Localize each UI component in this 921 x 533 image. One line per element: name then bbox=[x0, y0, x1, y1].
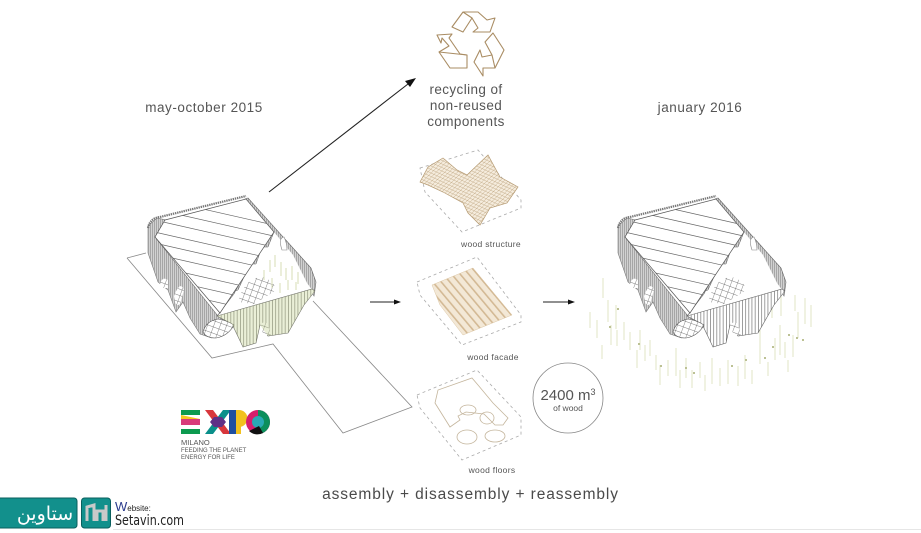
letter X bbox=[205, 410, 231, 434]
letter P bbox=[229, 410, 248, 434]
text: recycling of non-reused components: non-reused bbox=[430, 98, 502, 113]
arrow: to recycling bbox=[269, 78, 416, 192]
grass: small dots bbox=[609, 309, 804, 373]
callout: 2400 m3 of wood: 2400 m bbox=[540, 387, 591, 404]
callout: 2400 m3 of wood: of wood bbox=[553, 403, 583, 413]
heading: january 2016: january 2016 bbox=[657, 100, 742, 115]
logo text: ENERGY FOR LIFE bbox=[181, 455, 235, 461]
heading: may-october 2015: may-october 2015 bbox=[145, 100, 263, 115]
site plan outline bbox=[127, 253, 412, 433]
arrow: components to reassembled building bbox=[543, 300, 575, 304]
badge: icon bbox=[82, 498, 110, 528]
arrow: building to components bbox=[370, 300, 401, 304]
callout: 2400 m3 of wood: 3 bbox=[591, 387, 596, 397]
badge: Arabic name: ستاوین bbox=[17, 503, 73, 525]
label: wood facade: wood facade bbox=[466, 352, 519, 362]
text: recycling of non-reused components: recycling of bbox=[429, 82, 503, 97]
building: may-october 2015 bbox=[148, 196, 316, 347]
component: wood structure bbox=[420, 150, 521, 249]
footer line bbox=[113, 528, 921, 530]
logo text: FEEDING THE PLANET bbox=[181, 448, 247, 454]
badge: Arabic name bbox=[0, 498, 77, 528]
website text: ebsite: bbox=[127, 504, 151, 513]
green front wall tint bbox=[217, 289, 315, 347]
icon: recycling symbol bbox=[437, 12, 504, 76]
letter E bbox=[181, 410, 200, 434]
grass: surrounding meadow bbox=[590, 278, 811, 391]
letter O bbox=[246, 410, 270, 434]
text: recycling of non-reused components: components bbox=[427, 114, 505, 129]
component: wood facade bbox=[417, 257, 521, 362]
component: wood floors bbox=[417, 370, 521, 475]
label: wood floors: wood floors bbox=[468, 465, 515, 475]
callout: 2400 m3 of wood bbox=[533, 363, 603, 433]
logo text: MILANO bbox=[181, 438, 210, 447]
title: assembly + disassembly + reassembly: assembly + disassembly + reassembly bbox=[322, 486, 619, 503]
logo: EXPO Milano bbox=[181, 410, 270, 461]
courtyard plants bbox=[264, 255, 298, 293]
website text: W bbox=[115, 499, 128, 514]
building: january 2016 bbox=[618, 196, 786, 347]
watermark: Setavin logo bbox=[0, 498, 184, 529]
website text: Setavin.com bbox=[115, 513, 184, 529]
label: wood structure: wood structure bbox=[460, 239, 521, 249]
